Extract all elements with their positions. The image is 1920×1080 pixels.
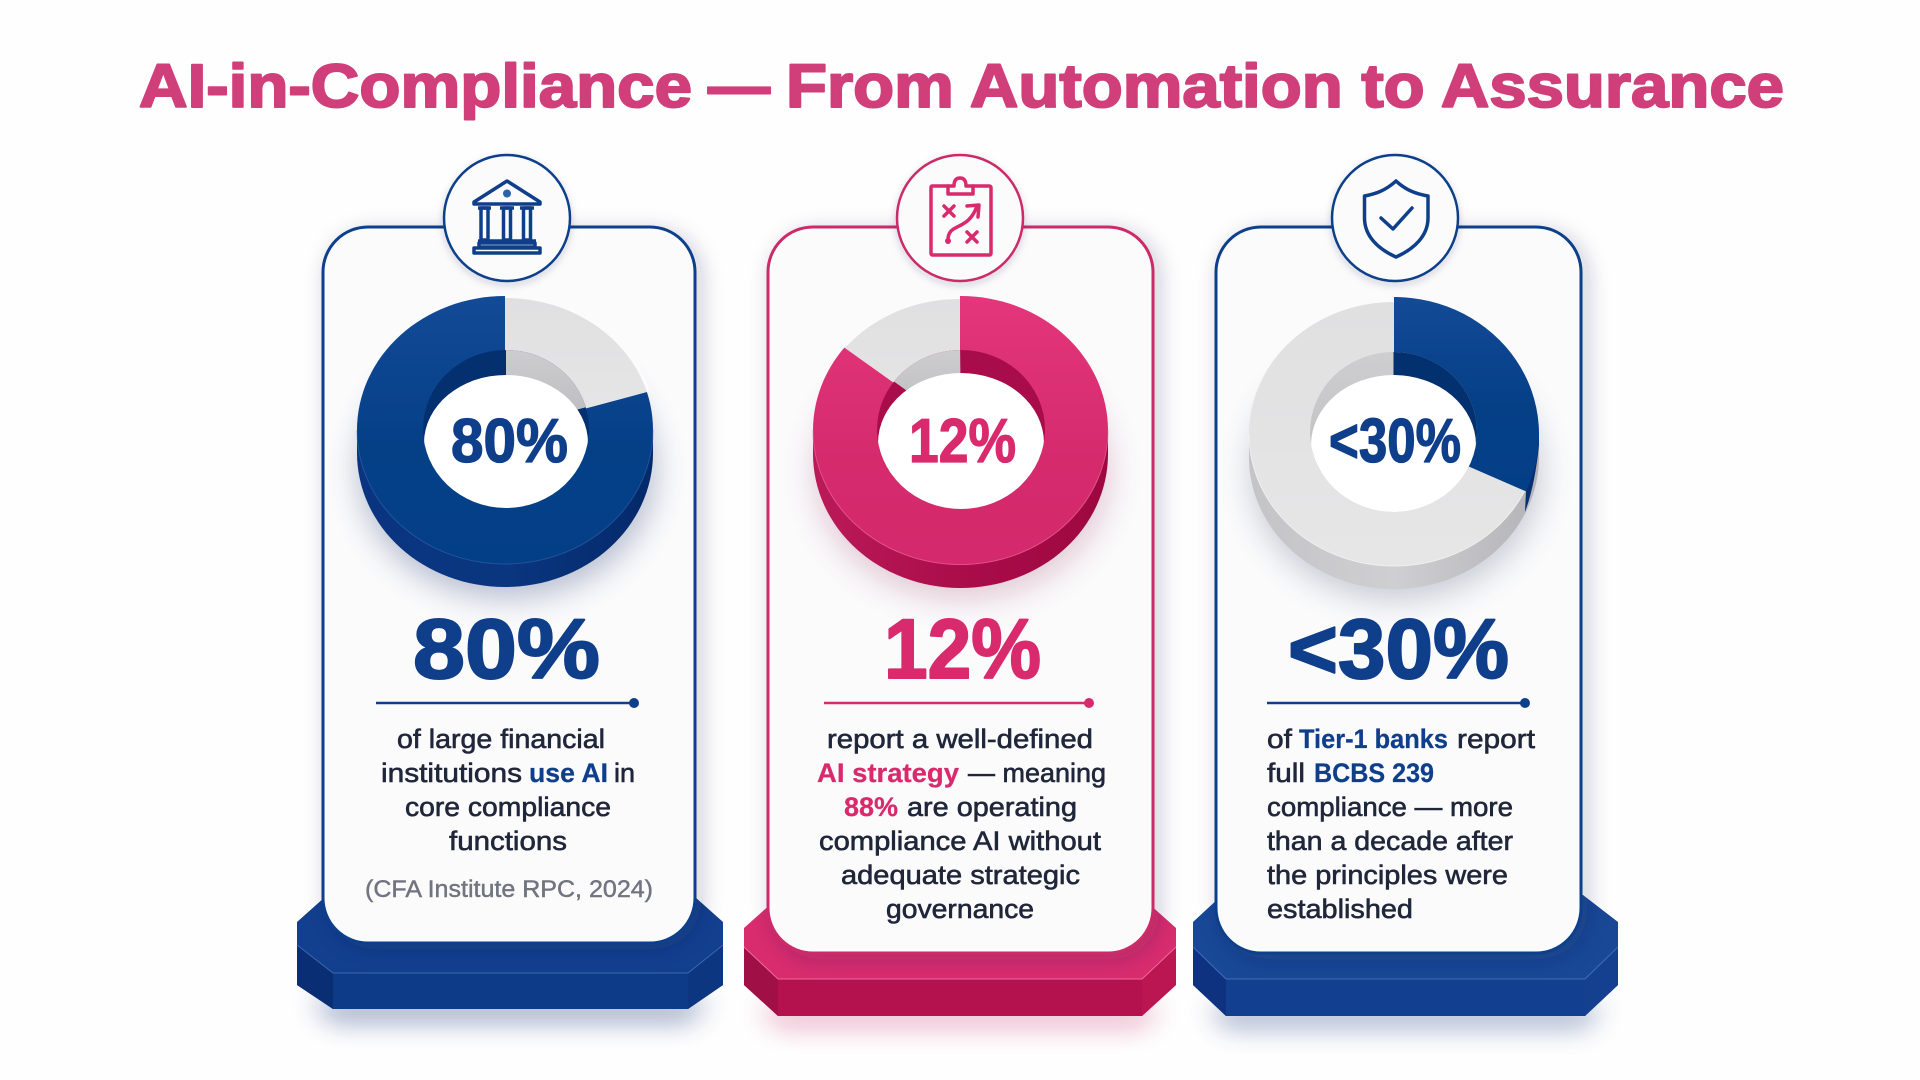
icon: strategy clipboard <box>897 155 1023 281</box>
big stat: 80%: 80% <box>413 602 600 696</box>
description text: — meaning <box>968 758 1106 788</box>
description text: adequate strategic <box>841 860 1080 890</box>
description text: established <box>1267 894 1413 924</box>
donut centre value: 80% <box>451 407 568 476</box>
icon: shield with check <box>1332 155 1458 281</box>
panel: 12% report a well-defined AI strategy <box>744 155 1176 1028</box>
description text: in <box>614 758 635 788</box>
divider with dot <box>376 698 639 708</box>
donut chart: 12% <box>813 295 1110 600</box>
description text: core compliance <box>405 792 611 822</box>
card outline <box>1216 227 1581 953</box>
panel: 80% of large financial institutions <box>297 155 723 1022</box>
title <box>139 52 1784 120</box>
divider with dot <box>824 698 1094 708</box>
card outline <box>323 227 695 943</box>
description text: 88% <box>844 792 898 822</box>
source note: (CFA Institute RPC, 2024) <box>365 876 653 903</box>
description text: governance <box>886 894 1034 924</box>
description text: the principles were <box>1267 860 1508 890</box>
description text: are operating <box>907 792 1077 822</box>
description text: functions <box>449 826 567 856</box>
description text: full <box>1267 758 1305 788</box>
donut chart: 80% <box>357 295 655 598</box>
plinth: pink base 2 <box>744 903 1176 1028</box>
description text: Tier-1 banks <box>1299 724 1448 754</box>
description text: compliance — more <box>1267 792 1513 822</box>
title: — <box>708 52 770 120</box>
description text: AI strategy <box>817 758 959 788</box>
description text: report <box>1457 724 1536 754</box>
description text: report a well-defined <box>827 724 1093 754</box>
title: AI-in-Compliance <box>139 52 692 120</box>
description text: than a decade after <box>1267 826 1513 856</box>
description text: BCBS 239 <box>1314 758 1434 788</box>
description text: of large financial <box>397 724 605 754</box>
description text: institutions <box>381 758 522 788</box>
description text <box>381 724 635 856</box>
panel: under 30% of Tier-1 banks <box>1193 155 1618 1028</box>
title: From Automation to Assurance <box>786 52 1784 120</box>
description text: compliance AI without <box>819 826 1102 856</box>
plinth: navy base 1 <box>297 897 723 1022</box>
big stat: under 30%: <30% <box>1288 602 1509 696</box>
donut centre value: <30% <box>1329 407 1461 476</box>
description text <box>1267 724 1536 924</box>
big stat: 12%: 12% <box>884 602 1041 696</box>
donut centre value: 12% <box>909 407 1016 476</box>
icon: bank building <box>444 155 570 281</box>
donut chart: under 30% <box>1249 297 1541 600</box>
card outline <box>768 227 1153 953</box>
description text: of <box>1267 724 1293 754</box>
description text <box>817 724 1106 924</box>
divider with dot <box>1267 698 1530 708</box>
plinth: navy base 3 <box>1193 895 1618 1028</box>
description text: use AI <box>529 758 608 788</box>
